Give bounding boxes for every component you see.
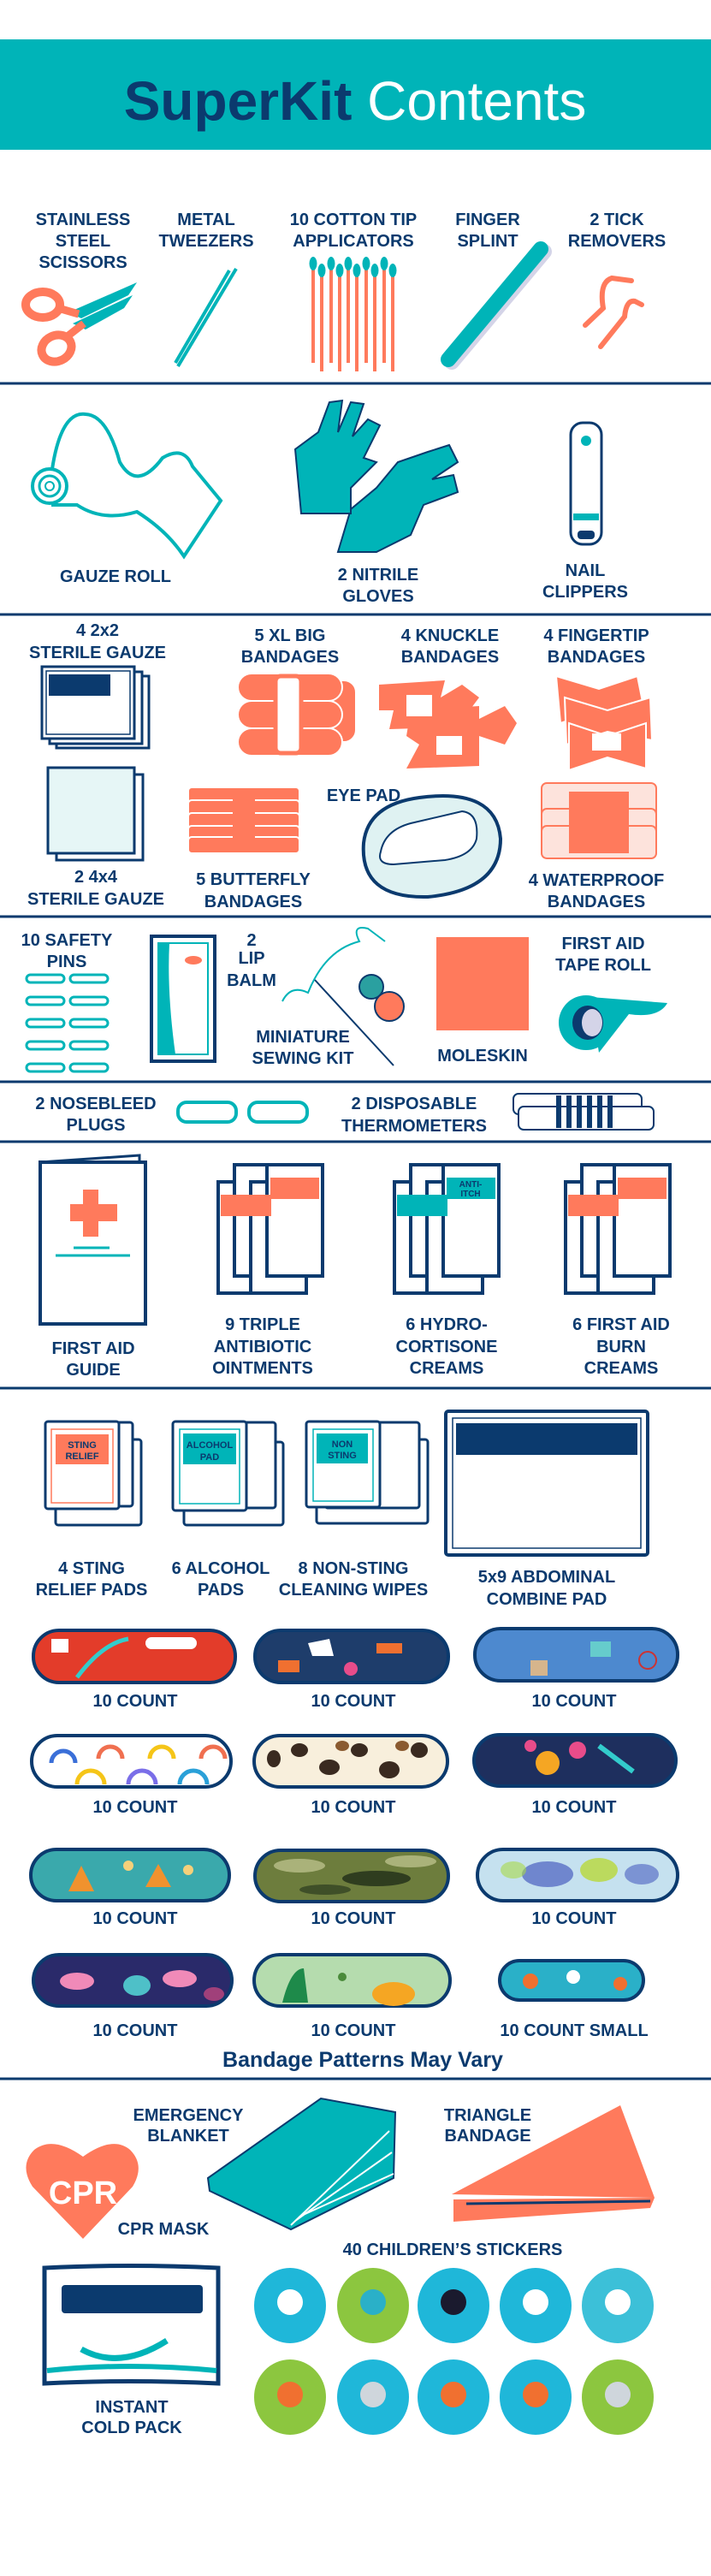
icon: nosebleed plugs (178, 1102, 307, 1122)
icon: non-sting wipes: NON (332, 1439, 353, 1450)
icon: finger splint (448, 249, 544, 362)
icon: scissors (26, 282, 137, 366)
label: nail clippers: NAIL (566, 561, 605, 580)
icon: moleskin (436, 937, 529, 1030)
icon: non-sting wipes (306, 1422, 428, 1523)
icon: nail clippers (571, 423, 601, 544)
label: moleskin: MOLESKIN (437, 1047, 528, 1065)
label: cold pack (81, 2398, 182, 2437)
label: tape roll (555, 935, 651, 975)
label: triangle bandage (444, 2106, 531, 2146)
label: cold pack: INSTANT (95, 2398, 169, 2417)
divider (0, 1386, 711, 1390)
label: sewing kit: SEWING KIT (252, 1049, 353, 1068)
icon: knuckle bandages (379, 680, 517, 769)
label: CPR mask: CPR MASK (118, 2220, 210, 2239)
label: gauze roll: GAUZE ROLL (60, 567, 171, 586)
icon: instant cold pack (44, 2266, 218, 2383)
icon: fingertip bandages (556, 676, 652, 770)
icon: triangle bandage (452, 2105, 655, 2222)
row 1 labels: 2 TICK (590, 211, 644, 229)
icon: sting relief pads: RELIEF (65, 1451, 99, 1462)
labels: 10 count: 10 COUNT (532, 1798, 616, 1817)
label: triangle bandage: TRIANGLE (444, 2106, 531, 2125)
icon: CPR mask heart: CPR (49, 2175, 117, 2211)
row 1 labels: REMOVERS (568, 232, 666, 251)
strip: dinosaurs (33, 1955, 232, 2006)
labels: pads: COMBINE PAD (487, 1590, 607, 1609)
label: fingertip bandages: 4 FINGERTIP (543, 626, 649, 645)
label: burn creams: 6 FIRST AID (572, 1315, 670, 1334)
header band (0, 39, 711, 150)
label: sewing kit (252, 1028, 353, 1068)
icon: first aid guide (40, 1155, 145, 1324)
strip: leopard (254, 1736, 447, 1787)
labels: pads (36, 1559, 615, 1609)
icon: lip balm (151, 936, 215, 1061)
row 1 labels: TWEEZERS (158, 232, 254, 251)
strip: rainbows (32, 1736, 231, 1787)
icon: alcohol pads: PAD (200, 1452, 219, 1463)
strip: navy floral (474, 1735, 676, 1786)
label: nitrile gloves: GLOVES (342, 587, 414, 606)
row 1 labels: STEEL (56, 232, 110, 251)
label: XL bandages: 5 XL BIG (255, 626, 325, 645)
label: lip balm: LIP (238, 949, 265, 968)
strip: camping (31, 1849, 229, 1901)
labels: 10 count (93, 1692, 649, 2040)
label: 2x2 gauze: STERILE GAUZE (29, 644, 166, 662)
label: nosebleed plugs (35, 1095, 157, 1135)
label: lip balm: 2 (246, 931, 257, 950)
strip: green dino (254, 1955, 450, 2006)
label: emergency blanket (133, 2106, 244, 2146)
labels: 10 count: 10 COUNT (311, 1692, 395, 1711)
label: antibiotic ointments: 9 TRIPLE (225, 1315, 300, 1334)
label: knuckle bandages: 4 KNUCKLE (401, 626, 499, 645)
label: antibiotic ointments (212, 1315, 313, 1378)
label: cold pack: COLD PACK (81, 2419, 182, 2437)
labels: 10 count: 10 COUNT (93, 1909, 177, 1928)
label: emergency blanket: EMERGENCY (133, 2106, 244, 2125)
labels: 10 count: 10 COUNT (93, 1692, 177, 1711)
label: thermometers: THERMOMETERS (341, 1117, 487, 1136)
strip: small teal (500, 1961, 643, 2000)
labels: 10 count: 10 COUNT (532, 1909, 616, 1928)
icon: alcohol pads (173, 1422, 283, 1525)
divider (0, 1080, 711, 1083)
labels: pads: CLEANING WIPES (279, 1581, 428, 1600)
icon: hydrocortisone (394, 1165, 499, 1293)
bandage strips grid (31, 1629, 678, 2006)
label: safety pins (21, 931, 113, 971)
row 1 labels: APPLICATORS (293, 232, 414, 251)
label: nitrile gloves: 2 NITRILE (338, 566, 418, 585)
label: 2x2 gauze: 4 2x2 (76, 621, 119, 640)
icon: sting relief pads: STING (68, 1440, 97, 1451)
label: butterfly bandages: BANDAGES (204, 893, 302, 911)
labels: pads: PADS (198, 1581, 244, 1600)
label: first aid guide: FIRST AID (51, 1339, 135, 1358)
icon: non-sting wipes: STING (328, 1451, 357, 1461)
labels: pads: 6 ALCOHOL (172, 1559, 270, 1578)
label: knuckle bandages (401, 626, 499, 667)
label: hydrocortisone: CORTISONE (396, 1338, 497, 1356)
label: nail clippers: CLIPPERS (542, 583, 628, 602)
icon: hydrocortisone: ANTI- (459, 1180, 482, 1190)
label: safety pins: 10 SAFETY (21, 931, 113, 950)
icon: 2x2 gauze (42, 667, 149, 748)
labels: 10 count: 10 COUNT (93, 1798, 177, 1817)
label: hydrocortisone: CREAMS (410, 1359, 483, 1378)
label: safety pins: PINS (47, 953, 86, 971)
label: lip balm (227, 931, 276, 990)
label: burn creams: CREAMS (584, 1359, 658, 1378)
icon: emergency blanket (208, 2098, 395, 2229)
label: thermometers: 2 DISPOSABLE (352, 1095, 477, 1113)
labels: 10 count: 10 COUNT (532, 1692, 616, 1711)
label: sewing kit: MINIATURE (256, 1028, 350, 1047)
icon: butterfly bandages (188, 787, 299, 853)
divider (0, 2078, 711, 2080)
label: butterfly bandages: 5 BUTTERFLY (196, 870, 311, 889)
labels: 10 count: 10 COUNT (311, 1798, 395, 1817)
strip: camo (255, 1850, 448, 1902)
divider (0, 1140, 711, 1143)
icon: abdominal pad (446, 1411, 648, 1555)
row 1 labels: METAL (177, 211, 235, 229)
title: SuperKit Contents (124, 70, 586, 132)
strip: navy animals (255, 1630, 448, 1683)
label: nitrile gloves (338, 566, 418, 606)
caption: bandage patterns: Bandage Patterns May Vary (222, 2048, 503, 2072)
icon: antibiotic ointments (218, 1165, 323, 1293)
label: hydrocortisone: 6 HYDRO- (406, 1315, 488, 1334)
label: XL bandages: BANDAGES (241, 648, 339, 667)
labels: pads: 8 NON-STING (299, 1559, 408, 1578)
label: thermometers (341, 1095, 487, 1136)
icon: sting relief pads (45, 1422, 141, 1525)
labels: 10 count: 10 COUNT (311, 1909, 395, 1928)
row 1 labels: STAINLESS (36, 211, 130, 229)
row 1 labels: 10 COTTON TIP (290, 211, 417, 229)
label: triangle bandage: BANDAGE (444, 2127, 531, 2146)
icon: CPR mask heart (26, 2144, 139, 2239)
icon: cotton swabs (310, 257, 397, 371)
labels: pads: 4 STING (58, 1559, 125, 1578)
label: butterfly bandages (196, 870, 311, 911)
strip: blue (475, 1629, 678, 1681)
icon: safety pins (27, 975, 108, 1071)
label: burn creams (572, 1315, 670, 1378)
icon: nitrile gloves (295, 401, 458, 552)
divider (0, 916, 711, 917)
icon: burn creams (566, 1165, 670, 1293)
row 1 labels: FINGER (455, 211, 520, 229)
icon: tweezers (175, 269, 236, 366)
label: 2x2 gauze (29, 621, 166, 662)
icon: sewing kit (282, 928, 404, 1065)
icon: tape roll (559, 995, 667, 1053)
label: first aid guide (51, 1339, 135, 1380)
stickers (254, 2268, 654, 2435)
labels: pads: 5x9 ABDOMINAL (478, 1568, 615, 1587)
label: fingertip bandages (543, 626, 649, 667)
label: waterproof bandages: 4 WATERPROOF (529, 871, 664, 890)
icon: gauze roll (33, 414, 221, 556)
label: nail clippers (542, 561, 628, 602)
strip: tie-dye (477, 1849, 678, 1901)
label: nosebleed plugs: PLUGS (67, 1116, 125, 1135)
label: tape roll: TAPE ROLL (555, 956, 651, 975)
labels: pads: RELIEF PADS (36, 1581, 147, 1600)
label: antibiotic ointments: OINTMENTS (212, 1359, 313, 1378)
label: 4x4 gauze (27, 868, 164, 909)
label: knuckle bandages: BANDAGES (401, 648, 499, 667)
strip: red (33, 1630, 235, 1683)
label: 4x4 gauze: 2 4x4 (74, 868, 118, 887)
label: emergency blanket: BLANKET (147, 2127, 229, 2146)
row 1 labels (36, 211, 666, 272)
labels: 10 count: 10 COUNT (93, 2021, 177, 2040)
divider (0, 382, 711, 385)
label: fingertip bandages: BANDAGES (548, 648, 645, 667)
label: hydrocortisone (396, 1315, 497, 1378)
label: burn creams: BURN (596, 1338, 646, 1356)
labels: 10 count: 10 COUNT SMALL (500, 2021, 649, 2040)
icon: alcohol pads: ALCOHOL (187, 1440, 233, 1451)
label: antibiotic ointments: ANTIBIOTIC (214, 1338, 311, 1356)
label: first aid guide: GUIDE (66, 1361, 121, 1380)
icon: hydrocortisone: ITCH (460, 1190, 481, 1199)
row 1 labels: SPLINT (457, 232, 518, 251)
label: stickers: 40 CHILDREN’S STICKERS (343, 2241, 562, 2259)
icon: tick removers (585, 278, 642, 347)
label: waterproof bandages: BANDAGES (548, 893, 645, 911)
icon: 4x4 gauze (48, 768, 143, 860)
label: nosebleed plugs: 2 NOSEBLEED (35, 1095, 157, 1113)
label: 4x4 gauze: STERILE GAUZE (27, 890, 164, 909)
label: eye pad: EYE PAD (327, 786, 400, 805)
labels: 10 count: 10 COUNT (311, 2021, 395, 2040)
row 1 labels: SCISSORS (39, 253, 127, 272)
divider (0, 613, 711, 616)
icon: eye pad (364, 796, 501, 897)
icon: thermometers (513, 1094, 654, 1130)
icon: waterproof bandages (542, 783, 656, 858)
label: XL bandages (241, 626, 339, 667)
label: lip balm: BALM (227, 971, 276, 990)
label: tape roll: FIRST AID (561, 935, 645, 953)
icon: XL bandages (238, 674, 356, 756)
label: waterproof bandages (529, 871, 664, 911)
